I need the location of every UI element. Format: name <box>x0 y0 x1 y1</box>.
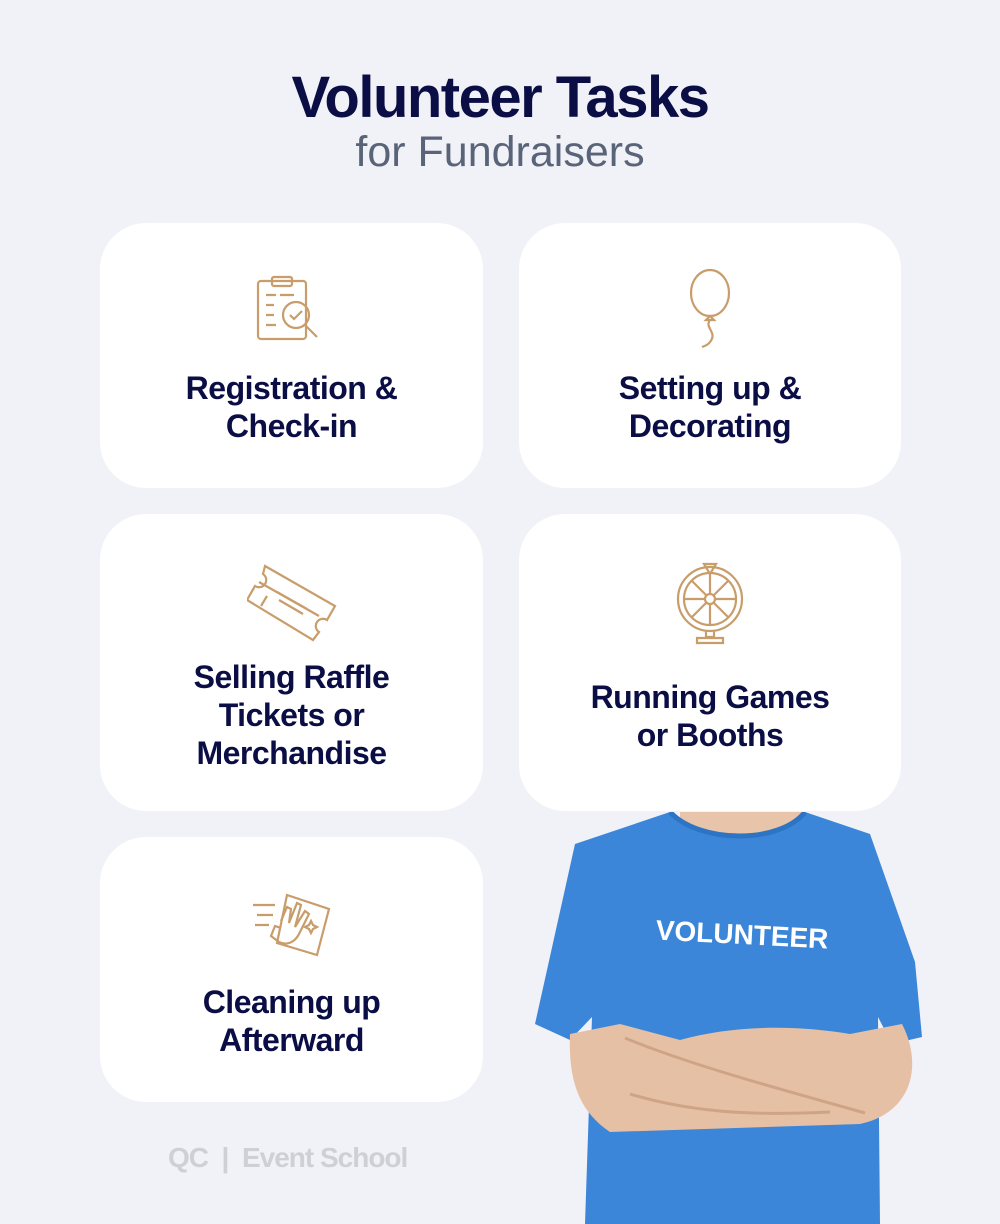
title: Volunteer Tasks <box>292 65 708 130</box>
card: games <box>519 514 901 811</box>
subtitle: for Fundraisers <box>355 128 645 176</box>
label: or Booths <box>637 717 783 753</box>
icon: balloon <box>690 268 730 348</box>
card: raffle <box>100 514 483 811</box>
icon: tickets <box>247 564 336 642</box>
label <box>619 370 801 444</box>
photo: volunteer in blue t-shirt <box>535 812 922 1224</box>
card: cleaning <box>100 837 483 1102</box>
label: Check-in <box>226 408 357 444</box>
label <box>591 679 829 753</box>
label: Merchandise <box>196 735 387 771</box>
label <box>186 370 397 444</box>
icon: clipboard magnifier <box>256 276 318 340</box>
label: Decorating <box>629 408 791 444</box>
label: Registration & <box>186 370 397 406</box>
icon: prize wheel <box>676 562 744 644</box>
label: Afterward <box>219 1022 364 1058</box>
card: setting up <box>519 223 901 488</box>
label <box>203 984 380 1058</box>
label: Selling Raffle <box>194 659 389 695</box>
shirt text: VOLUNTEER <box>655 915 829 955</box>
label: Tickets or <box>219 697 364 733</box>
logo: QC | Event School <box>168 1142 407 1173</box>
label: Cleaning up <box>203 984 380 1020</box>
label: Running Games <box>591 679 829 715</box>
card: registration <box>100 223 483 488</box>
label: Setting up & <box>619 370 801 406</box>
icon: hand with cloth <box>253 894 330 956</box>
label <box>194 659 389 771</box>
